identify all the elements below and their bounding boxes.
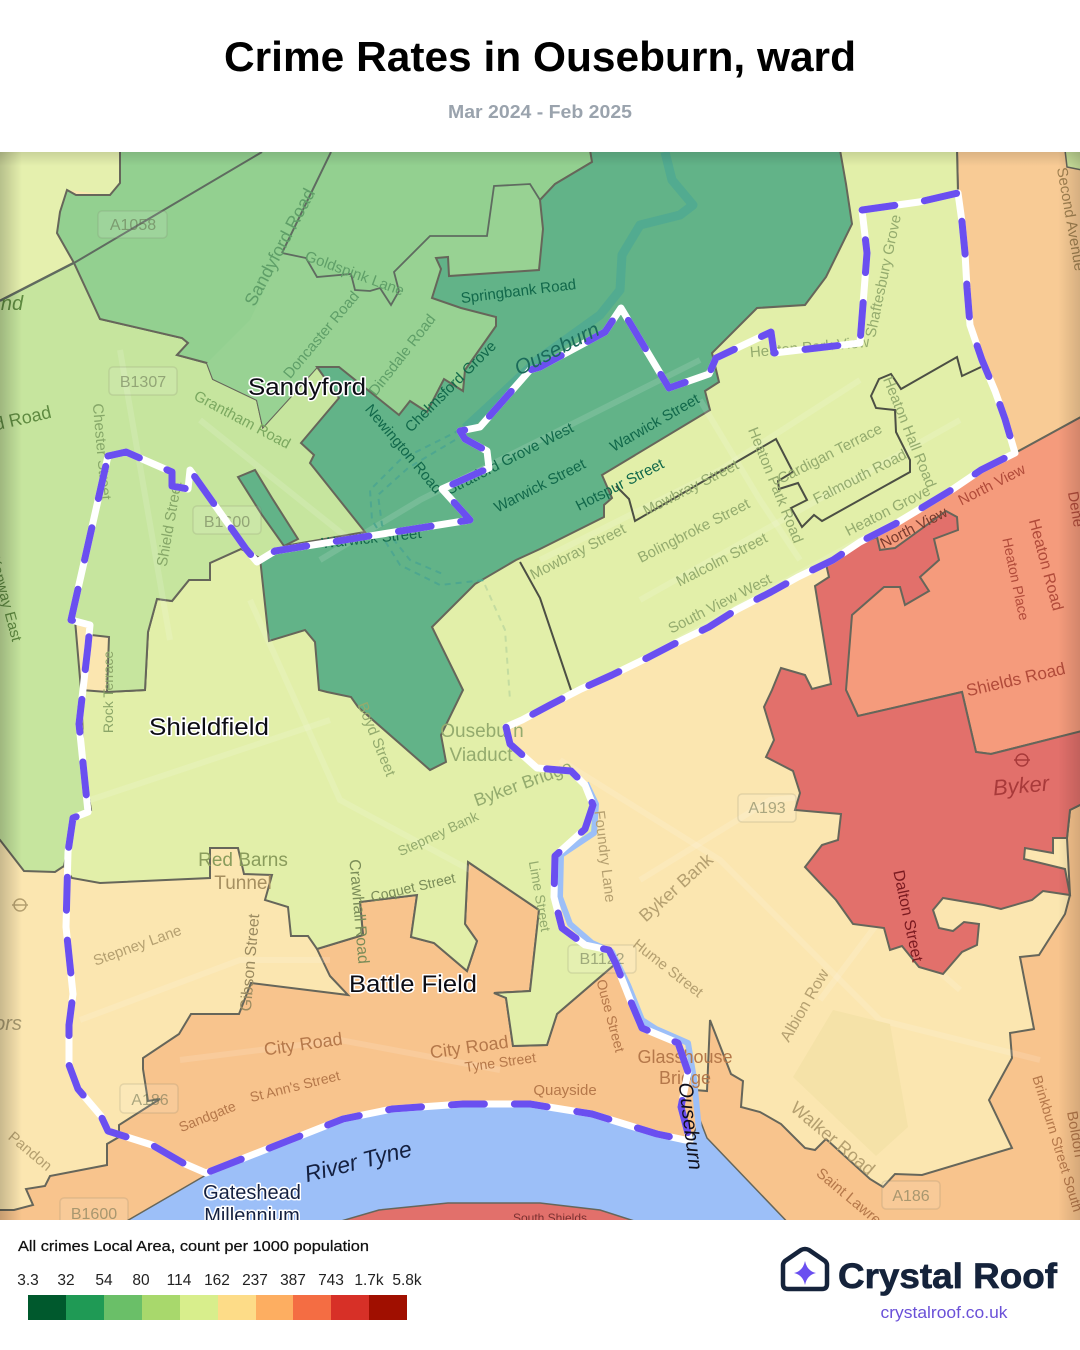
legend tick values bbox=[17, 1272, 422, 1289]
road lines: black boundary lines in Heaton bbox=[520, 357, 981, 690]
road labels: Sandyford Road bbox=[240, 185, 319, 309]
road labels: Shaftesbury Grove bbox=[862, 213, 905, 339]
road labels: Red Barns bbox=[198, 850, 288, 871]
road labels: Chester Street bbox=[89, 403, 114, 501]
metro symbol: west bbox=[12, 899, 28, 911]
road labels: Heaton Hall Road bbox=[879, 374, 939, 490]
road labels: Quayside bbox=[533, 1082, 597, 1099]
road badges bbox=[60, 211, 940, 1226]
road labels: South View West bbox=[665, 570, 775, 637]
place label: Gateshead Millennium: Gateshead bbox=[203, 1182, 301, 1204]
area: orange south bank and east bbox=[0, 800, 1080, 1230]
road labels: North View bbox=[956, 461, 1029, 509]
road labels: Heaton Park View bbox=[749, 334, 870, 361]
road line: A1058 boundary bbox=[0, 152, 262, 301]
road labels: Rock Terrace bbox=[100, 651, 116, 733]
road badges: B1307 bbox=[120, 374, 166, 391]
legend tick values: 32 bbox=[57, 1272, 75, 1289]
road labels: Warwick Street bbox=[607, 390, 703, 456]
website url: crystalroof.co.uk bbox=[880, 1304, 1008, 1322]
legend tick values: 237 bbox=[242, 1272, 268, 1289]
road labels: Stepney Bank bbox=[395, 807, 482, 859]
area: South Shields red bank bbox=[324, 1203, 650, 1226]
map edge shading bbox=[0, 152, 1080, 1220]
road labels: Warwick Street bbox=[321, 525, 423, 552]
area: Sandyford green bbox=[57, 150, 600, 427]
footpaths: dene dashed bbox=[370, 430, 485, 585]
road labels: Glasshouse bbox=[637, 1047, 733, 1067]
road labels: Crawhall Road bbox=[345, 859, 372, 965]
metro symbol: Byker bbox=[1014, 754, 1030, 766]
icon: house with sparkle bbox=[783, 1249, 827, 1289]
road labels: Ouseburn bbox=[440, 721, 524, 742]
road labels: Shields Road bbox=[964, 659, 1067, 700]
river: Ouseburn in the dene bbox=[465, 152, 693, 428]
road labels: Hume Street bbox=[629, 936, 707, 1002]
road labels: North View bbox=[878, 504, 951, 552]
legend tick values: 114 bbox=[167, 1272, 192, 1289]
road labels: Stratford Grove West bbox=[443, 419, 577, 498]
road labels: Byker Bridge bbox=[471, 756, 575, 810]
legend tick values: 54 bbox=[95, 1272, 113, 1289]
road labels: Doncaster Road bbox=[280, 288, 363, 382]
subtitle: date range: Mar 2024 - Feb 2025 bbox=[448, 102, 632, 122]
legend: crime count colour scale bbox=[17, 1238, 422, 1320]
road labels: Mowbray Street bbox=[527, 520, 629, 583]
road labels: Stepney Lane bbox=[91, 922, 184, 970]
road labels: Walker Road bbox=[787, 1098, 879, 1179]
road labels: Bridge bbox=[659, 1068, 711, 1088]
legend tick values: 1.7k bbox=[354, 1272, 384, 1289]
road labels: City Road bbox=[263, 1029, 344, 1059]
road labels: Cardigan Terrace bbox=[775, 420, 885, 488]
road labels: Byker Bank bbox=[635, 849, 718, 926]
river: Ouseburn lower channel bbox=[560, 783, 699, 1130]
place label: Shieldfield: Shieldfield bbox=[149, 714, 269, 741]
road labels: Tyne Street bbox=[464, 1049, 537, 1075]
river: River Tyne bbox=[125, 1104, 795, 1230]
road labels: Boyd Street bbox=[354, 700, 399, 780]
road labels: St Ann's Street bbox=[248, 1067, 342, 1105]
road badges: A186 bbox=[131, 1092, 169, 1109]
road labels: Malcolm Street bbox=[674, 529, 771, 590]
road labels: Mowbray Street bbox=[640, 456, 742, 519]
road badges: B1122 bbox=[579, 951, 625, 968]
road labels: Heaton Place bbox=[999, 536, 1032, 622]
road labels: Lime Street bbox=[526, 859, 554, 933]
road line: Sandyford Road boundary bbox=[282, 152, 331, 253]
road labels: Falmouth Road bbox=[810, 446, 910, 508]
road labels: City Road bbox=[429, 1032, 510, 1062]
road labels: Springbank Road bbox=[460, 276, 577, 307]
legend tick values: 387 bbox=[280, 1272, 306, 1289]
place label: Gateshead Millennium bbox=[203, 1182, 301, 1227]
road labels: Albion Row bbox=[778, 966, 833, 1045]
ward boundary: dashed white and purple outline bbox=[66, 193, 1015, 1173]
logo: Crystal Roof bbox=[780, 1246, 1058, 1322]
road labels: Grantham Road bbox=[191, 387, 293, 453]
area: pale orange base bbox=[0, 152, 1080, 1220]
title: Crime Rates in Ouseburn, ward bbox=[224, 33, 856, 80]
area: pale green north-west corner bbox=[0, 150, 120, 305]
legend tick values: 5.8k bbox=[392, 1272, 422, 1289]
legend heading: All crimes Local Area, count per 1000 population bbox=[18, 1238, 369, 1255]
road labels: Heaton Road bbox=[1025, 517, 1066, 613]
road labels: Viaduct bbox=[449, 745, 513, 766]
legend tick values: 80 bbox=[132, 1272, 150, 1289]
label: River Tyne: River Tyne bbox=[302, 1135, 414, 1187]
road labels: Heaton Grove bbox=[842, 482, 933, 540]
label: Ouseburn river south: Ouseburn bbox=[674, 1081, 706, 1171]
legend tick values: 3.3 bbox=[17, 1272, 39, 1289]
area: pale green central bbox=[64, 150, 1015, 1046]
road labels: Foundry Lane bbox=[590, 809, 619, 903]
road labels: Ouse Street bbox=[593, 978, 628, 1054]
label: Byker: Byker bbox=[992, 770, 1052, 800]
road line: Goldspink Lane boundary bbox=[282, 184, 540, 305]
road labels: Dalton Street bbox=[889, 869, 926, 964]
road labels: Heaton Park Road bbox=[744, 425, 806, 546]
road badges: B1600 bbox=[204, 514, 250, 531]
road labels: Warwick Street bbox=[491, 455, 589, 516]
area: cemetery bbox=[793, 1010, 908, 1156]
area: pale north-east corner bbox=[1065, 150, 1080, 170]
wordmark: Crystal Roof bbox=[838, 1257, 1057, 1296]
place label: Sandyford: Sandyford bbox=[248, 374, 366, 401]
legend colour swatches bbox=[28, 1295, 407, 1320]
area: Sandyford lighter south-east bbox=[207, 184, 543, 427]
road badges: A1058 bbox=[110, 217, 156, 234]
road badges: A186 bbox=[892, 1188, 930, 1205]
road labels: nd bbox=[1, 293, 24, 315]
legend tick values: 162 bbox=[204, 1272, 230, 1289]
road labels: Pandon bbox=[5, 1128, 55, 1175]
road labels: Goldspink Lane bbox=[303, 248, 406, 300]
label: Ouseburn river north: Ouseburn bbox=[511, 318, 603, 380]
area: dark green strip bbox=[238, 470, 298, 546]
legend tick values: 743 bbox=[318, 1272, 344, 1289]
road labels: Dinsdale Road bbox=[365, 311, 439, 399]
road labels: Coquet Street bbox=[369, 870, 457, 905]
place label: Battle Field: Battle Field bbox=[349, 971, 477, 998]
road labels: Bolingbroke Street bbox=[635, 495, 754, 567]
area: dark green Jesmond Dene bbox=[260, 150, 852, 770]
area: red Byker bbox=[764, 511, 1080, 974]
road labels: Hotspur Street bbox=[573, 455, 668, 515]
road labels: Newington Road bbox=[361, 401, 446, 497]
road labels: Tunnel bbox=[214, 873, 272, 894]
area: orange north-east bbox=[957, 150, 1080, 453]
area: mid green west bbox=[0, 262, 399, 872]
road labels: Chelmsford Grove bbox=[402, 338, 500, 436]
road labels bbox=[0, 166, 1080, 1244]
road badges: A193 bbox=[748, 800, 786, 817]
road labels: Gibson Street bbox=[238, 913, 263, 1012]
road tint: lighter streets bbox=[80, 350, 1040, 1070]
footpaths: viaduct dashed bbox=[485, 585, 510, 700]
area: light red Heaton bbox=[840, 412, 1080, 754]
road labels: Sandgate bbox=[176, 1098, 238, 1135]
map panel: crime choropleth bbox=[0, 152, 1080, 1220]
road labels: Shield Street bbox=[154, 480, 186, 568]
